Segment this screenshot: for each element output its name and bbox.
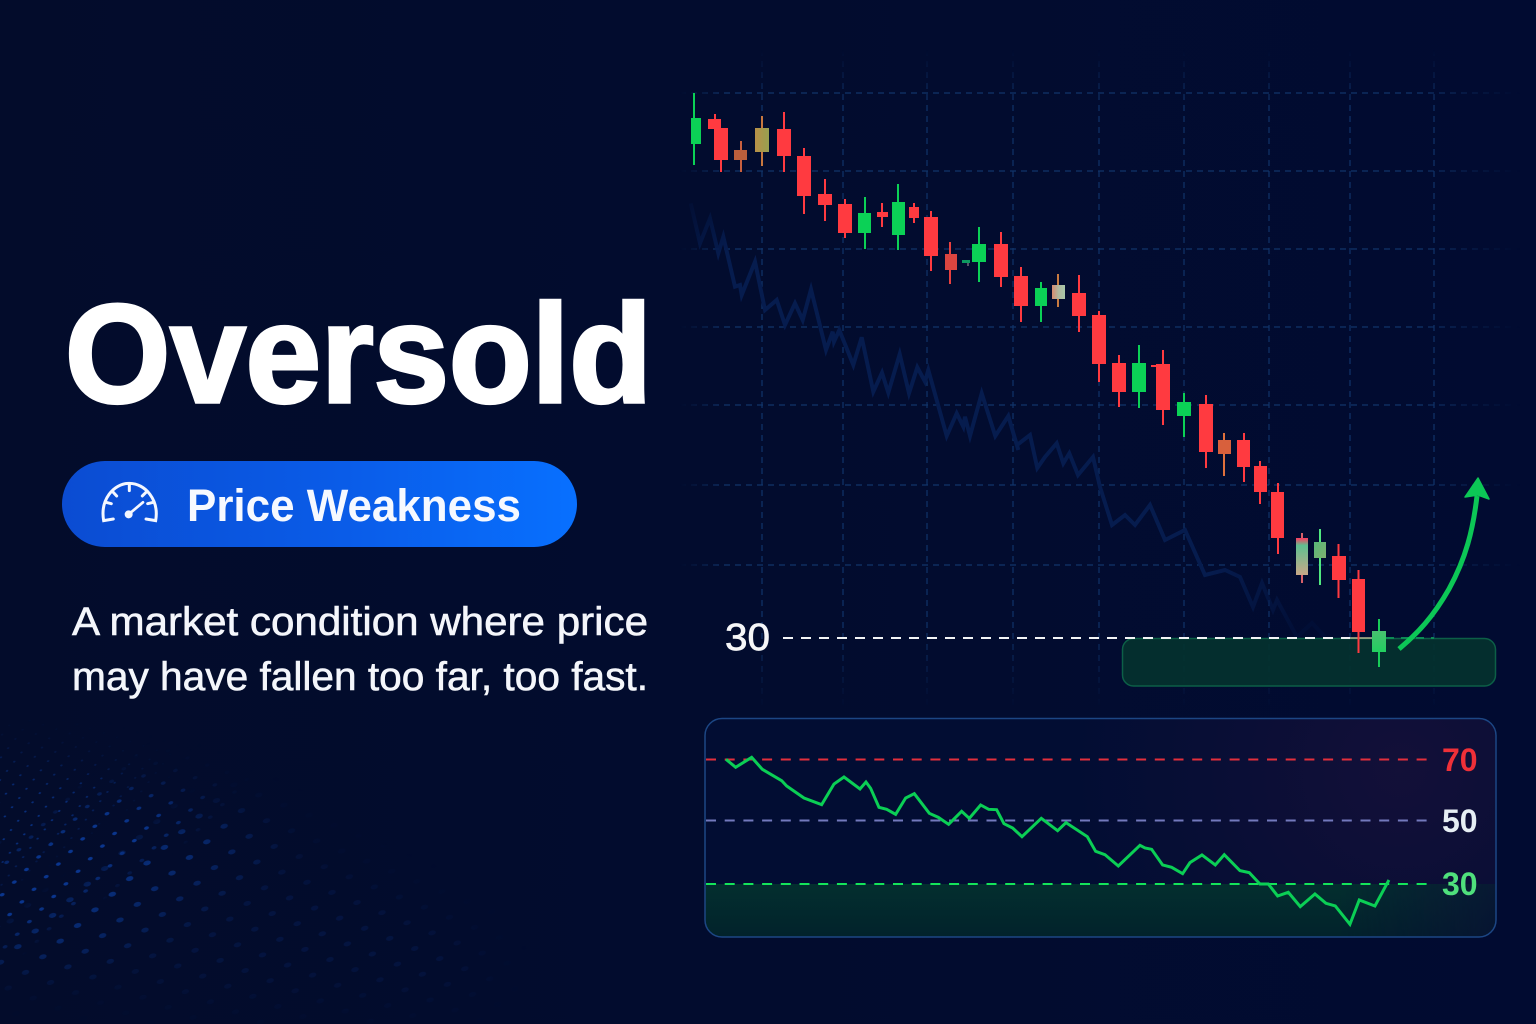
RSI label 70: 70 [1442, 742, 1478, 778]
candlestick chart [691, 93, 1386, 667]
RSI level lines [706, 760, 1431, 884]
RSI oversold shaded band [705, 884, 1496, 938]
RSI panel [705, 718, 1500, 938]
price level 30 dashed line [783, 637, 1434, 639]
description text [72, 600, 648, 699]
reversal arrow [1399, 478, 1489, 649]
icon: speedometer gauge [103, 483, 156, 521]
description text: A market condition where price [72, 600, 648, 644]
title: Oversold [65, 275, 652, 432]
RSI line [726, 757, 1389, 924]
faint background price line [691, 203, 1325, 637]
pill label: Price Weakness [187, 480, 521, 531]
description text: may have fallen too far, too fast. [72, 655, 648, 699]
pill badge: Price Weakness [62, 461, 577, 547]
chart grid [680, 50, 1520, 710]
oversold zone [1122, 638, 1496, 686]
price level label: 30: 30 [725, 617, 770, 659]
decorative dot field [0, 734, 468, 998]
RSI label 50: 50 [1442, 803, 1478, 839]
RSI label 30: 30 [1442, 866, 1478, 902]
